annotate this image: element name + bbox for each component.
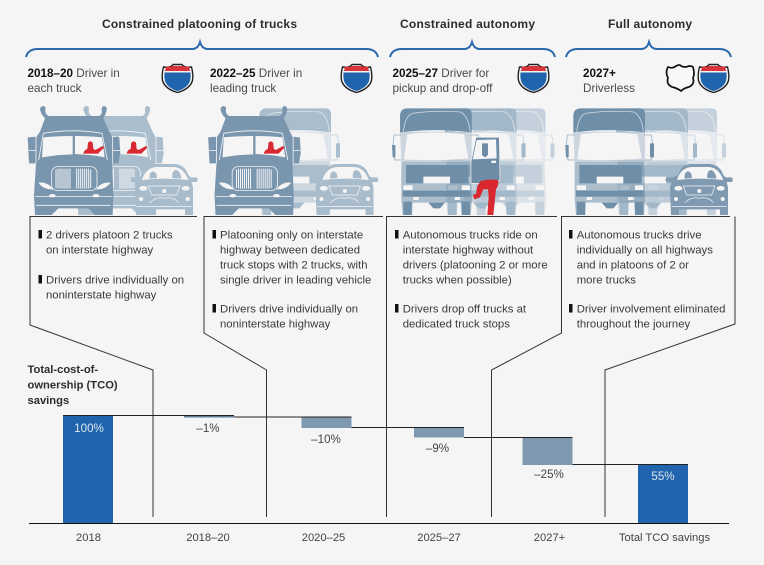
panel text: 2027+: individually on all highways bbox=[577, 244, 713, 256]
panel outline: 2022-25 bbox=[204, 216, 383, 517]
panel text: 2027+: Autonomous trucks drive bbox=[577, 230, 702, 242]
bar: 2020-25 -10% bbox=[302, 417, 352, 428]
panel outline: 2018-20 bbox=[30, 216, 197, 517]
panel text: 2018-20: noninterstate highway bbox=[46, 290, 157, 302]
panel text: 2022-25: Drivers drive individually on bbox=[220, 304, 358, 316]
axis label: 2018: 2018 bbox=[76, 532, 101, 544]
illustration: three autonomous trucks with driver stepping out bbox=[392, 108, 554, 215]
panel text: 2022-25: highway between dedicated bbox=[220, 244, 360, 256]
baseline axis bbox=[29, 522, 729, 524]
panel text: 2022-25: single driver in leading vehicle bbox=[220, 274, 371, 286]
panel text: 2018-20 bbox=[38, 230, 184, 302]
panel text: 2027+: Driver involvement eliminated bbox=[577, 304, 725, 316]
panel text: 2025-27: dedicated truck stops bbox=[403, 318, 510, 330]
axis label: 2020-25: 2020–25 bbox=[302, 532, 345, 544]
value: 100%: 100% bbox=[74, 422, 104, 435]
icon: interstate shield 1 bbox=[162, 64, 193, 92]
panel text: 2022-25: noninterstate highway bbox=[220, 318, 331, 330]
bar: total 55% bbox=[638, 464, 688, 523]
bar: 2018-20 -1% bbox=[184, 416, 234, 418]
chart title: savings bbox=[28, 395, 69, 407]
heading: constrained platooning of trucks: Constrained platooning of trucks bbox=[102, 17, 297, 31]
heading: full autonomy: Full autonomy bbox=[608, 17, 692, 31]
heading: constrained autonomy: Constrained autonomy bbox=[400, 17, 535, 31]
axis label: total TCO savings: Total TCO savings bbox=[619, 532, 710, 544]
illustration: lead truck with driver, driverless truck and car bbox=[208, 106, 378, 215]
bar: 2027+ -25% bbox=[522, 437, 572, 465]
panel text: 2018-20: 2 drivers platoon 2 trucks bbox=[46, 230, 173, 242]
panel text: 2025-27: trucks when possible) bbox=[403, 274, 512, 286]
panel outline: 2025-27 bbox=[386, 216, 557, 517]
stage title: 2022-25: 2022–25 Driver in bbox=[210, 67, 302, 80]
panel text: 2025-27: Autonomous trucks ride on bbox=[403, 230, 538, 242]
chart title: ownership (TCO) bbox=[28, 380, 118, 392]
panel text: 2018-20: Drivers drive individually on bbox=[46, 274, 184, 286]
bar: 2025-27 -9% bbox=[414, 428, 464, 438]
value: -10%: –10% bbox=[311, 433, 341, 446]
icon: route and interstate shields bbox=[666, 64, 729, 92]
panel text: 2022-25 bbox=[212, 230, 371, 330]
stage title: 2025-27: pickup and drop-off bbox=[392, 82, 493, 95]
stage title: 2027+: Driverless bbox=[583, 82, 635, 95]
stage title: 2027+: 2027+ bbox=[583, 67, 616, 80]
stage title: 2022-25: leading truck bbox=[210, 82, 276, 95]
illustration: three autonomous trucks and a car bbox=[565, 108, 733, 215]
panel text: 2025-27: interstate highway without bbox=[403, 244, 534, 256]
panel text: 2027+: more trucks bbox=[577, 274, 636, 286]
icon: interstate shield 2 bbox=[341, 64, 372, 92]
value: -25%: –25% bbox=[534, 468, 564, 481]
panel text: 2022-25: truck stops with 2 trucks, with bbox=[220, 260, 368, 272]
axis label: 2025-27: 2025–27 bbox=[417, 532, 461, 544]
value: -1%: –1% bbox=[196, 422, 220, 435]
brace: full autonomy bbox=[566, 42, 731, 57]
stage title: 2018-20: each truck bbox=[28, 82, 82, 95]
panel text: 2027+: and in platoons of 2 or bbox=[577, 260, 689, 272]
panel text: 2025-27: drivers (platooning 2 or more bbox=[403, 260, 548, 272]
brace: constrained autonomy bbox=[390, 42, 555, 57]
value: -9%: –9% bbox=[426, 442, 449, 455]
panel text: 2027+: throughout the journey bbox=[577, 318, 691, 330]
axis label: 2018-20: 2018–20 bbox=[186, 532, 230, 544]
connector lines bbox=[63, 416, 688, 464]
panel text: 2018-20: on interstate highway bbox=[46, 244, 154, 256]
stage title: 2025-27: 2025–27 Driver for bbox=[392, 67, 489, 80]
axis label: 2027+: 2027+ bbox=[534, 532, 565, 544]
illustration: two trucks with drivers and a car bbox=[28, 106, 198, 215]
panel text: 2025-27: Drivers drop off trucks at bbox=[403, 304, 526, 316]
bar: 2018 100% bbox=[63, 416, 113, 523]
waterfall chart bbox=[29, 416, 729, 544]
brace: constrained platooning bbox=[26, 42, 378, 57]
icon: interstate shield 3 bbox=[518, 64, 549, 92]
panel text: 2025-27 bbox=[395, 230, 548, 330]
panel text: 2027+ bbox=[569, 230, 725, 330]
panel outline: 2027+ with connector bbox=[492, 216, 730, 517]
stage title: 2018-20: 2018–20 Driver in bbox=[28, 67, 120, 80]
panel text: 2022-25: Platooning only on interstate bbox=[220, 230, 363, 242]
panel outline: right edge bbox=[605, 216, 735, 517]
value: 55%: 55% bbox=[651, 470, 675, 483]
chart title: Total-cost-of- bbox=[28, 364, 98, 376]
